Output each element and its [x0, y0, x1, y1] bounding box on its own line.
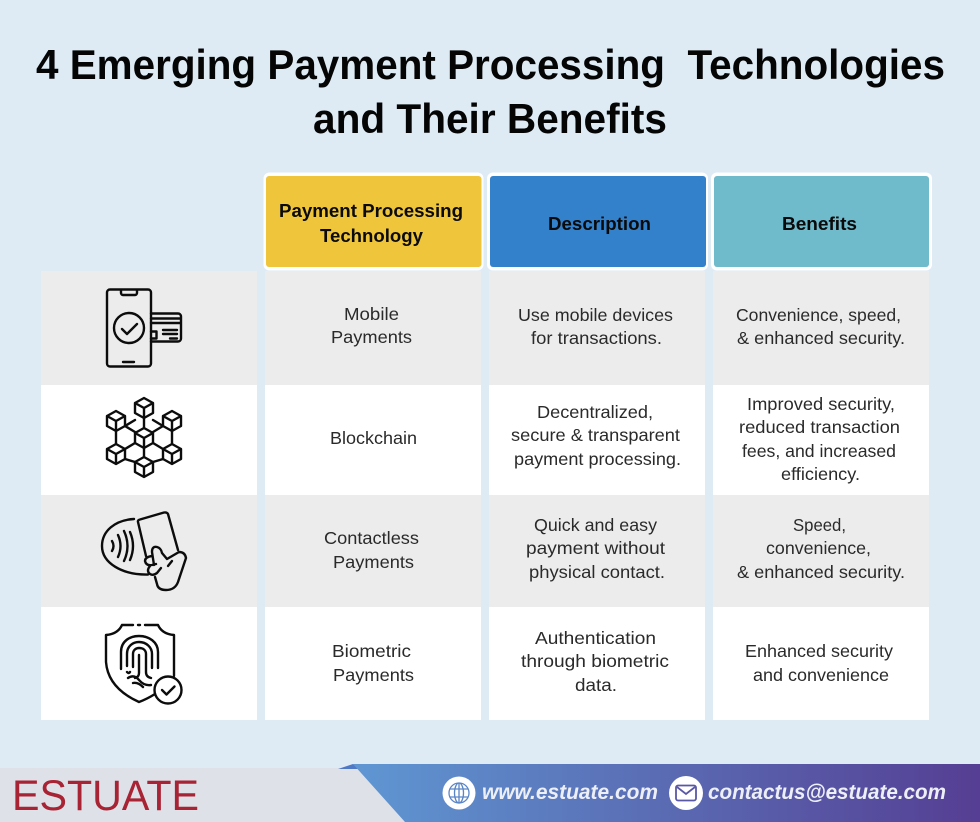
icon: envelope: [669, 776, 703, 810]
row: Contactless Payments: [41, 495, 929, 607]
title: and Their Benefits: [313, 95, 667, 142]
text: benefits: Speed,: [793, 515, 846, 535]
icon: phone and card: [107, 290, 181, 366]
text: description: physical contact.: [529, 562, 665, 582]
icon: fingerprint shield: [106, 625, 182, 704]
text: description: data.: [575, 675, 617, 695]
text: benefits: [745, 641, 893, 685]
text: description: Quick and easy: [534, 515, 657, 535]
text: benefits: [739, 394, 900, 484]
text: benefits: Improved security,: [747, 394, 895, 414]
text: benefits: convenience,: [766, 538, 871, 558]
logo: ESTUATE: ESTUATE: [12, 772, 199, 820]
text: benefits: Enhanced security: [745, 641, 893, 661]
header: Payment Processing Technology: [264, 172, 484, 270]
table header row: [264, 172, 932, 270]
text: benefits: & enhanced security.: [737, 562, 905, 582]
text: technology: [331, 304, 412, 347]
text: technology: Payments: [333, 552, 414, 572]
text: description: Decentralized,: [537, 402, 653, 422]
text: description: secure & transparent: [511, 425, 680, 445]
text: benefits: & enhanced security.: [737, 328, 905, 348]
footer: gradient band: [338, 764, 980, 822]
text: benefits: [736, 305, 905, 348]
text: technology: Payments: [331, 327, 412, 347]
text: description: [518, 305, 673, 348]
text: benefits: fees, and increased: [742, 441, 896, 461]
text: benefits: [737, 515, 905, 582]
text: description: [521, 628, 669, 695]
row: Blockchain: [41, 385, 929, 495]
text: benefits: Convenience, speed,: [736, 305, 901, 325]
website: www.estuate.com: [482, 781, 658, 804]
text: description: payment processing.: [514, 449, 681, 469]
text: description: [511, 402, 681, 469]
row: Biometric Payments: [41, 607, 929, 720]
text: description: through biometric: [521, 651, 669, 671]
row: Mobile Payments: [41, 271, 929, 385]
icon: contactless card in hand: [102, 512, 186, 590]
header: Description: [487, 172, 708, 270]
text: benefits: reduced transaction: [739, 417, 900, 437]
text: technology: Mobile: [344, 304, 399, 324]
icon: globe: [442, 776, 476, 810]
title: 4 Emerging Payment Processing Technologies: [36, 41, 945, 88]
text: technology: [324, 528, 419, 572]
email: contactus@estuate.com: [708, 781, 946, 804]
header: Payment Processing Technology: Technology: [320, 225, 424, 246]
text: description: for transactions.: [531, 328, 662, 348]
header: Payment Processing Technology: Payment Processing: [279, 200, 463, 221]
header: Benefits: Benefits: [782, 213, 857, 234]
text: technology: [332, 641, 414, 685]
text: description: payment without: [526, 538, 665, 558]
text: description: Use mobile devices: [518, 305, 673, 325]
text: technology: Biometric: [332, 641, 411, 661]
title: [36, 41, 945, 142]
header: Benefits: [711, 172, 932, 270]
text: technology: Contactless: [324, 528, 419, 548]
footer: logo band: [0, 768, 410, 822]
text: description: Authentication: [535, 628, 656, 648]
text: benefits: efficiency.: [781, 464, 860, 484]
header: Description: Description: [548, 213, 651, 234]
text: technology: Blockchain: [330, 428, 417, 448]
footer: [0, 764, 980, 822]
text: benefits: and convenience: [753, 665, 889, 685]
text: description: [526, 515, 665, 582]
icon: blockchain cubes: [107, 398, 181, 477]
text: technology: Payments: [333, 665, 414, 685]
